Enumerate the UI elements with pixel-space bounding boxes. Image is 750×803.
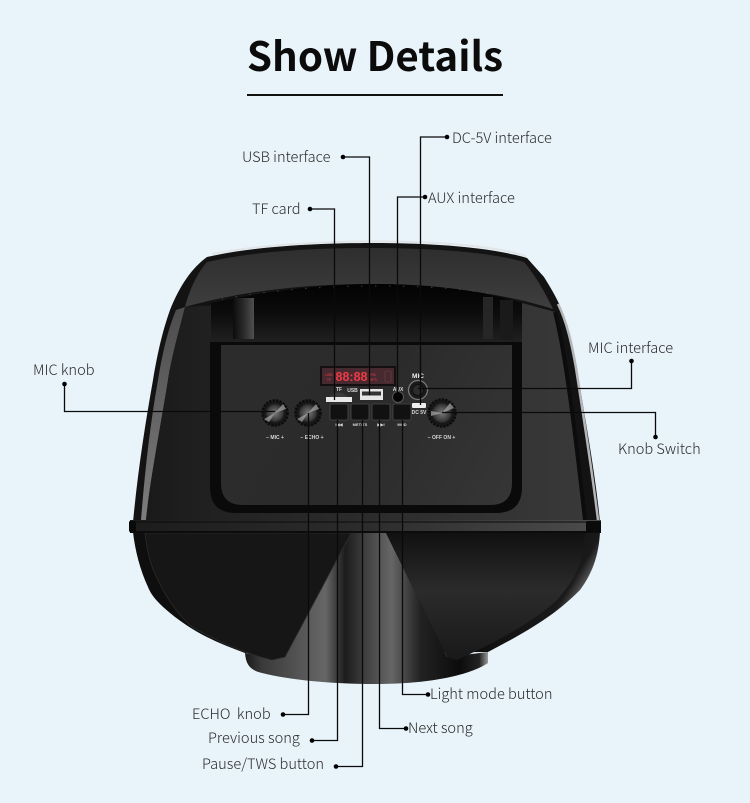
control panel — [221, 345, 512, 505]
handle grip right — [483, 297, 513, 340]
AUX jack: AUX — [393, 387, 404, 393]
title underline — [247, 94, 503, 96]
LED display: 88:88 — [336, 370, 368, 384]
left wing — [145, 533, 351, 660]
ECHO knob: − ECHO + — [300, 435, 324, 441]
ECHO knob — [296, 400, 324, 441]
TF slot: TF — [336, 387, 342, 393]
callout: USB interface — [242, 146, 370, 395]
top rim highlight — [212, 242, 526, 256]
DC 5V port: DC 5V — [412, 410, 427, 416]
callout: ECHO knob: ECHO knob — [192, 703, 271, 724]
callout: Previous song: Previous song — [208, 727, 300, 748]
callout: MIC interface: MIC interface — [588, 337, 673, 358]
USB port: USB — [347, 388, 358, 394]
equator band — [129, 520, 601, 533]
callout: MIC knob: MIC knob — [33, 359, 95, 380]
MIC knob — [262, 400, 288, 441]
buttons — [330, 404, 411, 420]
LED display: FM — [370, 373, 376, 377]
callout: Knob Switch — [442, 412, 701, 459]
lower body — [133, 532, 600, 653]
callout: Next song — [380, 420, 473, 738]
handle recess — [211, 284, 522, 342]
callout: Pause/TWS button: Pause/TWS button — [202, 753, 324, 774]
button captions: ▶▶I — [376, 422, 385, 427]
speaker upper body — [133, 243, 600, 522]
MIC knob: − MIC + — [266, 435, 284, 441]
LED display: MP3 — [369, 378, 377, 382]
callout: Light mode button — [402, 420, 552, 704]
handle grip left — [233, 298, 254, 339]
callout: TF card: TF card — [252, 198, 301, 219]
speaker — [129, 242, 601, 684]
callout: DC-5V interface: DC-5V interface — [452, 127, 552, 148]
MIC jack — [408, 373, 428, 400]
callout: USB interface: USB interface — [242, 146, 331, 167]
AUX jack — [392, 387, 404, 402]
DC 5V port — [412, 403, 427, 416]
button captions: I◀◀ — [335, 422, 344, 427]
power knob — [428, 400, 456, 441]
callout: Next song: Next song — [408, 717, 473, 738]
callout: MIC interface — [418, 337, 673, 388]
body side panels — [146, 300, 585, 520]
button captions: MOD — [397, 422, 407, 427]
USB port — [347, 388, 383, 400]
right outer gloss — [558, 304, 598, 520]
LED display: TF — [327, 378, 331, 382]
callout: AUX interface: AUX interface — [428, 187, 515, 208]
MIC jack: MIC — [412, 373, 424, 380]
base and center stand — [245, 533, 488, 684]
right wing — [386, 533, 585, 660]
top handle surface — [185, 248, 553, 309]
callout: MIC knob — [33, 359, 275, 412]
callout: Pause/TWS button — [202, 420, 362, 774]
right panel edge — [555, 312, 585, 520]
callout: Light mode button: Light mode button — [430, 683, 552, 704]
panel text and controls — [262, 366, 456, 441]
handle rivets — [222, 286, 498, 299]
callout: TF card — [252, 198, 334, 400]
callout: Previous song — [208, 420, 338, 748]
callout: ECHO knob — [192, 413, 308, 724]
LED display — [320, 366, 396, 386]
title: Show Details — [247, 24, 503, 83]
left gloss edge — [141, 307, 185, 520]
callout: AUX interface — [398, 187, 515, 396]
button captions: MET/TS — [353, 422, 368, 427]
power knob: − OFF ON + — [428, 435, 455, 441]
control frame — [210, 342, 522, 513]
LED display: USB — [325, 373, 333, 377]
button captions — [335, 422, 407, 427]
TF slot — [326, 387, 352, 402]
callout: Knob Switch: Knob Switch — [618, 438, 701, 459]
callout: DC-5V interface — [420, 127, 552, 405]
